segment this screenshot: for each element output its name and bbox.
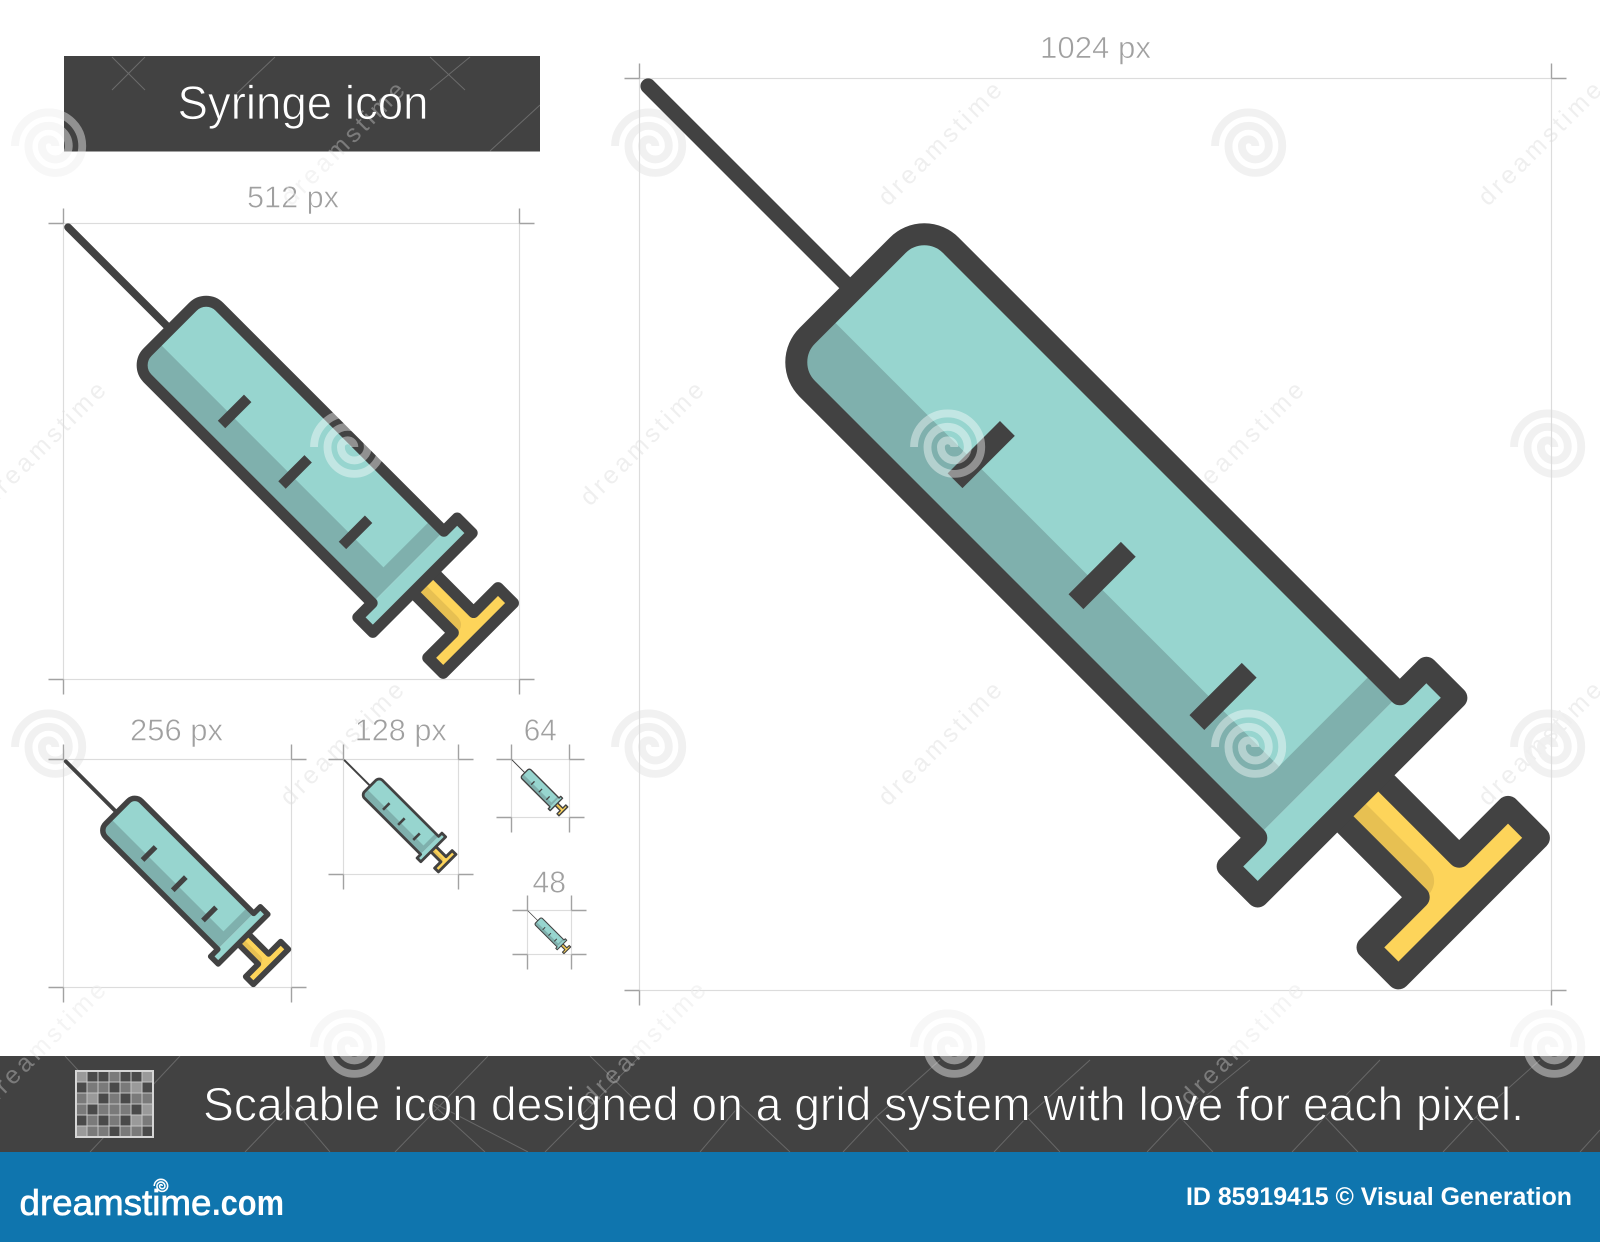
- footer: blue brand bar: [0, 1152, 1600, 1242]
- icon: syringe 64: [506, 754, 570, 818]
- label: 1024 px: 1024 px: [1040, 30, 1151, 65]
- icon: brand spiral: [154, 1179, 168, 1191]
- icon: pixel grid: [76, 1071, 153, 1137]
- watermark: faint diagonal wordmarks: dreamstime: [275, 75, 412, 211]
- text: tagline: Scalable icon designed on a grid system with love for each pixel.: [203, 1078, 1524, 1131]
- label: 128 px: 128 px: [355, 713, 447, 748]
- panel: 256 px size: [41, 713, 306, 1002]
- icon: syringe 128: [332, 748, 460, 876]
- label: 256 px: 256 px: [130, 713, 223, 748]
- watermark: faint diagonal wordmarks: dreamstime: [872, 75, 1009, 211]
- panel: 48 px size: [512, 865, 586, 970]
- label: 48: 48: [532, 865, 566, 900]
- icon: syringe 48: [523, 906, 572, 955]
- icon: syringe 1024: [548, 0, 1567, 1008]
- watermark: translucent wordmarks over dark bars: dreamstime: [576, 975, 713, 1111]
- header: title banner: [64, 56, 540, 152]
- watermark: faint spirals on white: [15, 112, 1581, 1074]
- watermark: translucent wordmarks over dark bars: dreamstime: [275, 75, 412, 211]
- text: brand wordmark: .com: [212, 1182, 284, 1223]
- label: 64: 64: [524, 713, 557, 748]
- watermark: faint diagonal wordmarks: dreamstime: [574, 375, 711, 511]
- label: 512 px: 512 px: [247, 180, 339, 214]
- header: title banner: Syringe icon: [178, 76, 428, 129]
- text: brand wordmark: dreamstime: [20, 1182, 212, 1223]
- watermark: faint diagonal wordmarks: dreamstime: [1174, 975, 1311, 1111]
- watermark: faint diagonal wordmarks: dreamstime: [1174, 375, 1311, 511]
- watermark: faint diagonal wordmarks: dreamstime: [274, 675, 411, 811]
- footer: dark tagline bar: [0, 1056, 1600, 1152]
- text: image id and credit: ID 85919415 © Visual Generation: [1186, 1183, 1572, 1211]
- panel: 128 px size: [328, 713, 474, 890]
- watermark: faint diagonal wordmarks: dreamstime: [576, 975, 713, 1111]
- watermark: translucent spirals over artwork: [15, 112, 1581, 1074]
- icon: syringe 512: [18, 178, 528, 688]
- watermark: translucent wordmarks over dark bars: dreamstime: [1174, 975, 1311, 1111]
- icon: syringe 256: [41, 737, 296, 992]
- watermark: faint diagonal wordmarks: dreamstime: [872, 675, 1009, 811]
- panel: 512 px size: [18, 178, 534, 694]
- panel: 64 px size: [496, 713, 584, 832]
- watermark: translucent wordmarks over dark bars: [0, 75, 1311, 1111]
